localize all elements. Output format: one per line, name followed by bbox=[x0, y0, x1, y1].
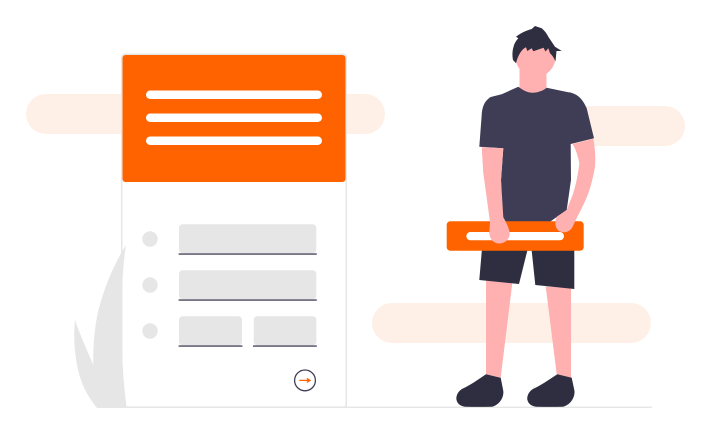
t-shirt bbox=[479, 87, 594, 222]
card header bbox=[122, 55, 346, 182]
left shoe bbox=[456, 374, 503, 407]
form row 3 bbox=[142, 316, 317, 347]
right arm and hand bbox=[555, 139, 595, 232]
legs bbox=[486, 280, 571, 378]
form card bbox=[122, 54, 346, 407]
ground line bbox=[97, 407, 652, 408]
shorts bbox=[479, 245, 574, 289]
form row 1 bbox=[142, 224, 317, 255]
card outline bbox=[122, 54, 346, 407]
person bbox=[447, 26, 595, 407]
form row 2 bbox=[142, 270, 317, 301]
hair bbox=[512, 26, 562, 63]
left arm and hand bbox=[482, 147, 510, 244]
background pill: upper right bbox=[560, 106, 685, 146]
right shoe bbox=[527, 374, 575, 407]
background pill: upper left bbox=[26, 94, 385, 134]
hold bar bbox=[447, 221, 584, 251]
background pill: lower bbox=[372, 303, 651, 343]
submit arrow button bbox=[295, 370, 315, 391]
head bbox=[516, 37, 556, 77]
neck bbox=[520, 60, 546, 96]
plant bbox=[74, 245, 127, 408]
